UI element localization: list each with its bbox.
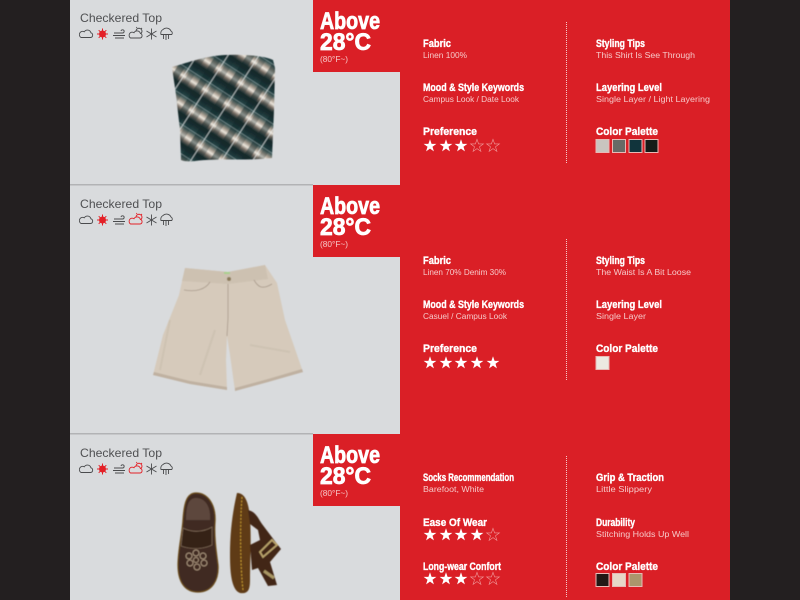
details: preference rating xyxy=(423,126,499,151)
image: beige shorts xyxy=(153,265,303,391)
temperature tag xyxy=(313,185,400,257)
details: styling tips xyxy=(596,38,695,60)
details: mood and style keywords xyxy=(423,299,524,321)
details: styling tips: The Waist Is A Bit Loose xyxy=(596,268,692,277)
details: preference rating: Preference xyxy=(423,126,477,138)
details: durability xyxy=(596,517,689,539)
details: layering level: Single Layer / Light Layering xyxy=(596,95,710,104)
temperature tag: (80°F~) xyxy=(320,489,348,498)
temperature tag: 28°C xyxy=(320,463,371,490)
details: socks recommendation: Barefoot, White xyxy=(423,485,485,494)
details: ease of wear rating xyxy=(423,517,499,540)
details: socks recommendation xyxy=(423,472,514,494)
details: preference rating: Preference xyxy=(423,343,477,355)
title: Checkered Top xyxy=(80,197,162,211)
details: color palette: Color Palette xyxy=(596,343,658,355)
details: layering level: Single Layer xyxy=(596,312,646,321)
details: fabric: Fabric xyxy=(423,255,451,267)
details: mood and style keywords xyxy=(423,82,524,104)
temperature tag: Above xyxy=(320,442,380,469)
details: durability: Stitching Holds Up Well xyxy=(596,530,689,539)
details: layering level: Layering Level xyxy=(596,82,662,94)
details: grip and traction: Grip & Traction xyxy=(596,472,664,484)
details: grip and traction: Little Slippery xyxy=(596,485,652,494)
details: styling tips: This Shirt Is See Through xyxy=(596,51,695,60)
details: long-wear comfort rating: Long-wear Confort xyxy=(423,561,501,573)
details: mood and style keywords: Campus Look / Date Look xyxy=(423,95,520,104)
image: plaid top xyxy=(172,55,275,161)
temperature tag: (80°F~) xyxy=(320,55,348,64)
weather icons xyxy=(79,213,172,226)
card 1: checkered top xyxy=(79,0,710,163)
details: fabric: Fabric xyxy=(423,38,451,50)
details: fabric: Linen 100% xyxy=(423,51,467,60)
details: mood and style keywords: Mood & Style Keywords xyxy=(423,82,524,94)
title: Checkered Top xyxy=(80,446,162,460)
weather icons xyxy=(79,462,172,475)
temperature tag: (80°F~) xyxy=(320,240,348,249)
temperature tag: Above xyxy=(320,193,380,220)
details: styling tips: Styling Tips xyxy=(596,38,645,50)
details: mood and style keywords: Mood & Style Keywords xyxy=(423,299,524,311)
details: fabric: Linen 70% Denim 30% xyxy=(423,268,506,277)
temperature tag: Above xyxy=(320,8,380,35)
details: long-wear comfort rating xyxy=(423,561,501,584)
image: brown sandals xyxy=(178,493,281,593)
temperature tag: 28°C xyxy=(320,29,371,56)
card 2: shorts xyxy=(79,185,692,391)
details: mood and style keywords: Casuel / Campus Look xyxy=(423,312,508,321)
right red panel xyxy=(400,0,730,600)
details: layering level xyxy=(596,82,710,104)
details: ease of wear rating: Ease Of Wear xyxy=(423,517,488,529)
temperature tag xyxy=(313,0,400,72)
details: color palette: Color Palette xyxy=(596,561,658,573)
details: layering level: Layering Level xyxy=(596,299,662,311)
details: color palette xyxy=(596,343,658,370)
left gray panel xyxy=(70,0,400,600)
weather icons xyxy=(79,27,172,40)
details: fabric xyxy=(423,255,506,277)
temperature tag: 28°C xyxy=(320,214,371,241)
details: styling tips xyxy=(596,255,692,277)
details: color palette: Color Palette xyxy=(596,126,658,138)
details: fabric xyxy=(423,38,467,60)
details: styling tips: Styling Tips xyxy=(596,255,645,267)
details: layering level xyxy=(596,299,662,321)
title: Checkered Top xyxy=(80,11,162,25)
details: grip and traction xyxy=(596,472,664,494)
details: socks recommendation: Socks Recommendation xyxy=(423,472,514,484)
details: color palette xyxy=(596,126,658,152)
details: color palette xyxy=(596,561,658,586)
details: durability: Durability xyxy=(596,517,636,529)
details: preference rating xyxy=(423,343,499,368)
temperature tag xyxy=(313,434,400,506)
card 3: sandals xyxy=(79,434,689,597)
